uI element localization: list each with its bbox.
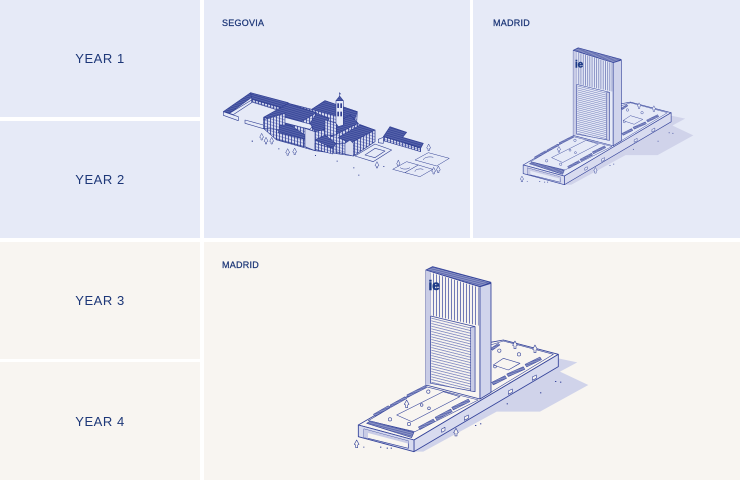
panel: large Madrid campus background — [204, 242, 740, 480]
panel: year 2 — [0, 121, 200, 238]
panel: year 3: YEAR 3 — [75, 293, 125, 308]
panel: Segovia campus background — [204, 0, 470, 238]
heading: Madrid large: MADRID — [222, 260, 259, 270]
central front blocks — [277, 113, 358, 154]
panel: year 4: YEAR 4 — [75, 414, 125, 428]
logo: ie on large tower: ie — [428, 277, 440, 293]
panel: year 3 — [0, 242, 200, 359]
garden plots — [393, 153, 449, 177]
back hall and rear roof — [263, 101, 357, 130]
panel: year 4 — [0, 362, 200, 480]
central mass under the roofs — [263, 101, 375, 156]
panel: year 2: YEAR 2 — [75, 172, 125, 187]
panel: small Madrid campus background — [473, 0, 740, 238]
logo: ie on small tower: ie — [575, 60, 584, 70]
panel: year 1: YEAR 1 — [75, 51, 125, 66]
annex building — [378, 127, 423, 152]
trees and dots — [260, 133, 440, 174]
illustration: large Madrid campus — [354, 267, 588, 452]
bell tower — [336, 93, 343, 127]
panel: year 1 — [0, 0, 200, 117]
heading: Segovia: SEGOVIA — [222, 18, 264, 28]
illustration: Segovia campus — [223, 93, 449, 177]
left wing — [223, 93, 288, 129]
illustration: small Madrid campus — [520, 48, 693, 185]
cloister — [355, 144, 392, 162]
heading: Madrid small: MADRID — [493, 18, 530, 28]
right block — [336, 125, 375, 156]
